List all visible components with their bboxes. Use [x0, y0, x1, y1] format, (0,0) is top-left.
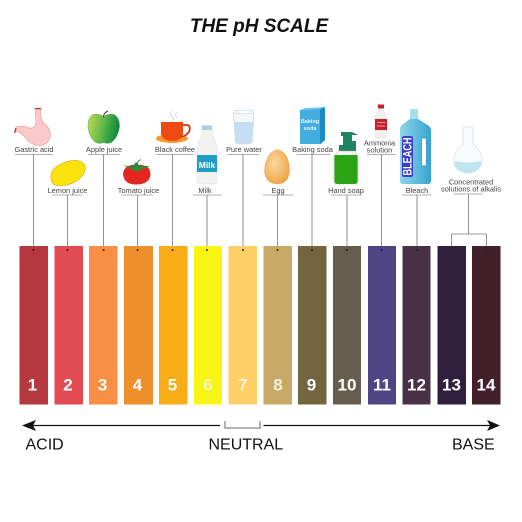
label: neutral: NEUTRAL: [208, 436, 283, 454]
bar 5: 5: [168, 376, 177, 394]
icon: ammonia bottle: [375, 104, 387, 138]
label: base: BASE: [452, 436, 495, 454]
label: baking soda: Baking soda: [292, 145, 334, 154]
label: milk: [193, 186, 222, 195]
label: egg: Egg: [271, 186, 285, 195]
icon: baking soda box: soda: [304, 126, 317, 132]
title: THE pH SCALE: [190, 16, 329, 37]
bar 9: [298, 246, 326, 404]
icon: egg: [264, 150, 290, 184]
bar 12: [402, 246, 430, 404]
bar 14: 14: [477, 376, 496, 394]
label: bleach: Bleach: [406, 186, 428, 195]
bar 2: 2: [63, 376, 73, 394]
arrow: base direction: [264, 420, 500, 431]
bar 5: [159, 246, 188, 404]
bar 7: [228, 246, 257, 404]
label: apple juice: Apple juice: [86, 145, 122, 154]
bar 4: [124, 246, 153, 404]
label: lemon juice: Lemon juice: [48, 186, 87, 195]
label: ammonia solution: solution: [367, 146, 392, 154]
icon: glass of water: [234, 110, 254, 144]
label: ammonia solution: Ammonia: [364, 138, 396, 148]
icon: milk bottle: [197, 126, 217, 184]
label: milk: Milk: [198, 186, 212, 195]
icon: flask: [454, 127, 482, 173]
label: egg: [263, 186, 293, 195]
bar 14: [472, 246, 500, 404]
bar 3: 3: [98, 376, 107, 394]
label: acid: ACID: [26, 436, 64, 454]
neutral bracket: [225, 421, 260, 428]
bar 1: [20, 246, 48, 404]
bar 13: [438, 246, 466, 404]
bar 8: 8: [273, 376, 283, 394]
panel: pH colour bars: [20, 246, 500, 404]
label: pure water: Pure water: [226, 145, 262, 154]
label: concentrated solutions of alkalis: [441, 178, 501, 194]
bar 10: [333, 246, 361, 404]
label: concentrated solutions of alkalis: solutions of alkalis: [441, 184, 501, 194]
bar 7: 7: [238, 376, 248, 394]
icon: tomato: [123, 160, 150, 185]
label: gastric acid: Gastric acid: [14, 145, 54, 154]
bar 12: 12: [407, 376, 426, 394]
icon: apple: [88, 111, 120, 143]
label: ammonia solution: [364, 138, 396, 154]
label: hand soap: Hand soap: [328, 186, 364, 195]
label: black coffee: Black coffee: [155, 145, 195, 154]
bar 11: 11: [373, 376, 391, 394]
icon: baking soda box: Baking: [301, 119, 319, 125]
icon: hand soap: [334, 132, 358, 184]
bar 13: 13: [442, 376, 461, 394]
arrow: acid direction: [22, 420, 220, 431]
label: concentrated solutions of alkalis: Concentrated: [449, 178, 493, 186]
icon: baking soda box: [300, 107, 325, 144]
icon: stomach: [14, 108, 50, 145]
icon: coffee cup: [156, 111, 190, 143]
bar 6: 6: [203, 376, 213, 394]
bar 9: 9: [307, 376, 316, 394]
icon: milk bottle: Milk: [199, 160, 216, 170]
icon: bleach bottle: [400, 109, 431, 184]
bar 2: [54, 246, 83, 404]
bar 10: 10: [338, 376, 356, 394]
icon: bleach bottle: BLEACH: [400, 138, 414, 176]
bar 3: [89, 246, 118, 404]
bar 6: [194, 246, 222, 404]
connector lines: [34, 154, 486, 246]
bar 4: 4: [133, 376, 143, 394]
icon: lemon: [51, 160, 86, 186]
bar 11: [368, 246, 396, 404]
bar 1: 1: [28, 376, 37, 394]
label: tomato juice: Tomato juice: [118, 186, 159, 195]
bar 8: [264, 246, 292, 404]
